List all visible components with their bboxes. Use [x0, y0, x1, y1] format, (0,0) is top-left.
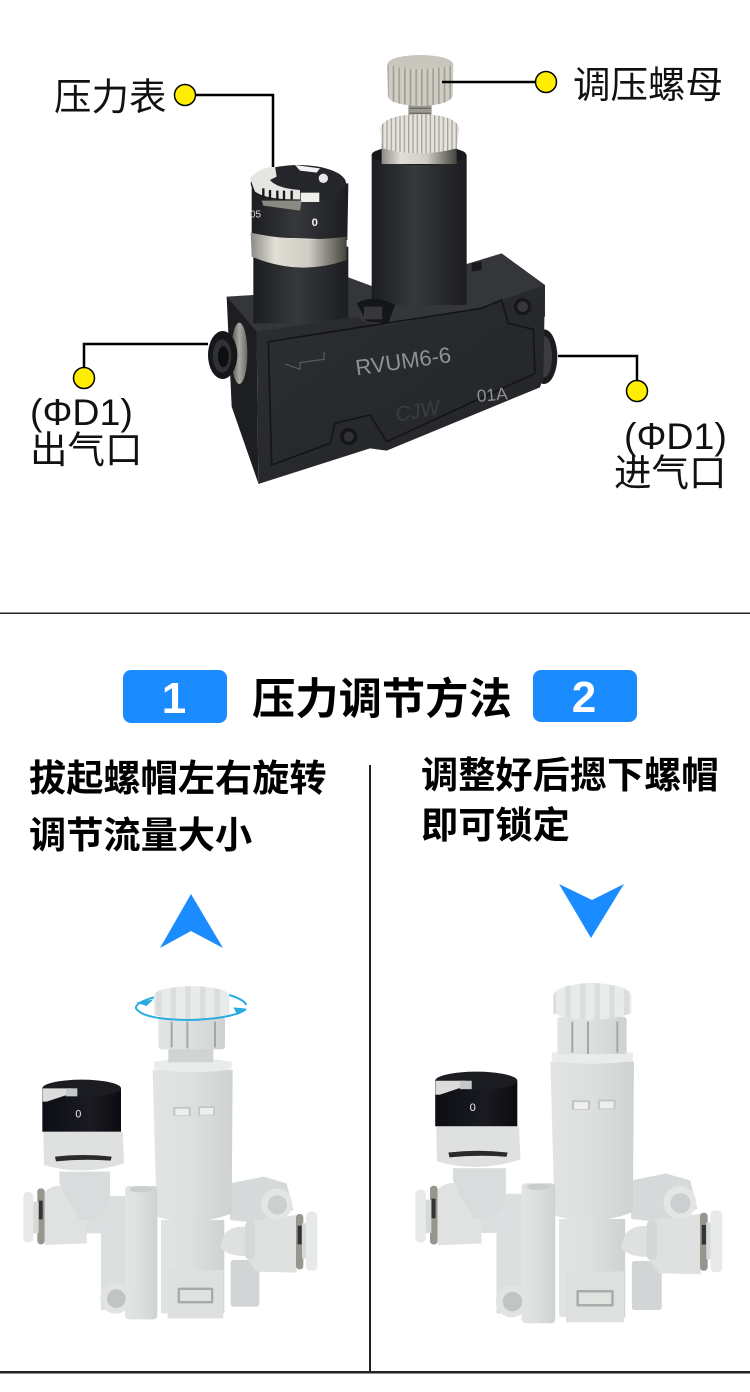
logo mark: CJW — [394, 396, 444, 427]
arrow: pull up — [160, 894, 223, 948]
gauge zero mark: 0 — [75, 1108, 81, 1120]
step 1 instruction: 拔起螺帽左右旋转 — [29, 757, 327, 799]
badge 1: 1 — [162, 674, 186, 723]
tall column — [125, 1186, 157, 1319]
callout: pressure gauge — [54, 76, 273, 167]
lower centre body — [559, 1219, 625, 1317]
callout: air outlet — [30, 344, 208, 471]
callout dot — [74, 368, 94, 388]
right port — [220, 1212, 317, 1273]
right boss — [261, 1189, 292, 1220]
badge 1 — [123, 670, 227, 723]
heading row — [123, 670, 637, 724]
valve base front — [257, 262, 545, 484]
valve base top and side — [227, 253, 545, 483]
step 2 instruction — [421, 754, 719, 846]
main cylinder — [153, 1058, 233, 1222]
badge 2: 2 — [572, 673, 596, 722]
gauge scale mark: 05 — [250, 210, 262, 221]
callout dot — [174, 84, 196, 106]
heading text: 压力调节方法 — [252, 676, 512, 724]
right push-fit port — [531, 329, 557, 384]
flow direction arrow mark — [285, 352, 324, 369]
gauge zero mark: 0 — [312, 217, 318, 229]
callout dot — [626, 380, 648, 402]
rear block — [230, 1177, 293, 1223]
regulator cylinder — [372, 145, 467, 305]
elbow — [453, 1168, 506, 1219]
front plate — [566, 1271, 624, 1322]
lower centre body — [161, 1220, 224, 1313]
gauge — [435, 1072, 520, 1167]
left stem — [101, 1227, 128, 1310]
step 1 instruction: 调节流量大小 — [29, 814, 252, 856]
rear block — [631, 1173, 697, 1222]
callout text: (ΦD1) — [624, 415, 727, 457]
left stem — [496, 1226, 524, 1313]
product photo: step 2 grey regulator — [415, 983, 722, 1323]
left push-fit port — [208, 323, 247, 384]
gauge — [42, 1080, 124, 1170]
knurled adjusting knob — [387, 55, 453, 106]
code label: 01A — [476, 383, 509, 406]
left port — [415, 1183, 523, 1245]
regulator body — [415, 1049, 722, 1323]
rotation arrow ring — [136, 995, 247, 1020]
elbow — [59, 1172, 110, 1220]
step 2 instruction: 即可锁定 — [421, 804, 570, 846]
main cylinder — [550, 1049, 634, 1221]
callout leader line — [558, 356, 637, 391]
gauge zero mark: 0 — [470, 1102, 476, 1114]
lower boss — [100, 1283, 131, 1314]
product photo: step 1 grey regulator — [23, 986, 317, 1319]
arrow: press down — [559, 884, 624, 938]
callout text: 出气口 — [30, 429, 142, 471]
callout text: 压力表 — [54, 76, 166, 118]
tall column — [521, 1183, 555, 1323]
right boss — [663, 1186, 696, 1219]
lower boss — [496, 1285, 528, 1317]
gauge head — [250, 165, 348, 268]
model label: RVUM6-6 — [354, 342, 453, 380]
callout text: (ΦD1) — [30, 391, 133, 433]
callout leader line — [442, 81, 546, 83]
callout: air inlet — [558, 356, 727, 494]
callout text: 进气口 — [614, 452, 726, 494]
step 2 instruction: 调整好后摁下螺帽 — [421, 754, 719, 796]
badge 2 — [533, 670, 637, 722]
callout dot — [536, 72, 556, 92]
gauge lower body — [253, 247, 348, 323]
front plate — [168, 1270, 223, 1318]
callout: adjusting nut — [442, 64, 723, 106]
step 1 instruction — [29, 757, 327, 856]
adjustment knob raised — [154, 986, 229, 1062]
left port — [23, 1186, 127, 1245]
rear stem — [231, 1260, 259, 1307]
callout text: 调压螺母 — [573, 64, 723, 106]
product photo: black pressure regulator — [208, 55, 557, 484]
rear stem — [632, 1261, 662, 1310]
right port — [621, 1210, 722, 1274]
adjusting nut and thread — [380, 103, 459, 164]
adjustment knob pressed — [553, 983, 631, 1054]
callout leader line — [185, 95, 273, 167]
callout leader line — [84, 344, 208, 378]
